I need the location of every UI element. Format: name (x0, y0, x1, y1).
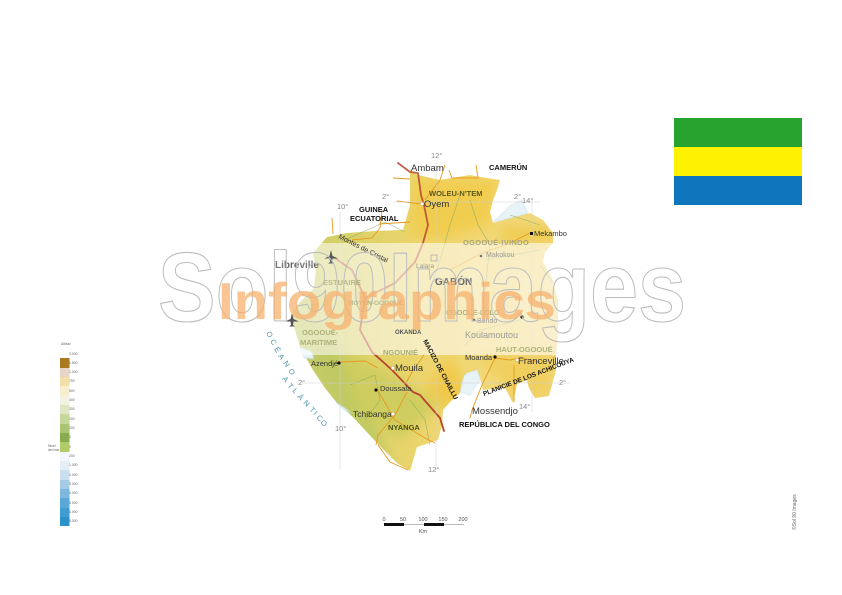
ocean label: C (268, 338, 279, 347)
ocean label: N (281, 359, 292, 369)
scale bar: 200 (458, 517, 468, 523)
legend labels: 300 (69, 407, 75, 411)
graticule labels: 10° (337, 202, 348, 211)
ocean label: O (319, 418, 329, 429)
legend labels: 0 (69, 445, 71, 449)
ocean label: T (285, 381, 296, 391)
graticule labels: 14° (519, 402, 530, 411)
secondary roads (332, 165, 540, 470)
legend labels: 0 (69, 435, 71, 439)
place labels: Mekambo (534, 229, 567, 238)
graticule labels (298, 151, 566, 474)
region and country labels: MARITIME (300, 338, 337, 347)
place labels: Doussala (380, 384, 412, 393)
region and country labels: CAMERÚN (489, 163, 527, 172)
ocean label: A (280, 375, 291, 384)
place labels: Ambam (411, 163, 444, 174)
ocean label: C (315, 413, 325, 424)
rotated relief labels: PLANICIE DE LOS ACHICOUYA (482, 357, 575, 398)
legend labels: 3.000 (69, 352, 78, 356)
legend labels: 200 (69, 454, 75, 458)
legend labels: 4.000 (69, 491, 78, 495)
lake and river blue patches (300, 200, 528, 414)
ocean label: L (291, 386, 300, 395)
legend colour scale (60, 358, 70, 526)
legend labels: 100 (69, 426, 75, 430)
place labels: Azendjé (311, 359, 338, 368)
scale bar: Km (419, 529, 428, 535)
graticule labels: 12° (431, 151, 442, 160)
main road (335, 163, 444, 431)
translucent watermark band (200, 243, 565, 355)
graticule lines (300, 164, 570, 470)
region and country labels: ECUATORIAL (350, 214, 399, 223)
region and country labels: GUINEA (359, 205, 389, 214)
city dots (337, 232, 533, 392)
place labels: Oyem (424, 199, 449, 210)
scale bar: 150 (438, 517, 448, 523)
ocean label: O (264, 330, 275, 339)
ocean label: Á (296, 392, 306, 402)
region and country labels: HAUT-OGOOUÉ (496, 345, 553, 354)
watermark: Infographics: Infographics (218, 273, 556, 331)
land area (285, 165, 565, 475)
ocean label (264, 330, 329, 429)
flag of Gabon (674, 118, 802, 205)
scale bar: 50 (400, 517, 406, 523)
scale bar: 100 (418, 517, 428, 523)
region and country labels: OGOOUÉ- (302, 328, 339, 337)
legend labels: 1.000 (69, 463, 78, 467)
region and country labels: REPÚBLICA DEL CONGO (459, 420, 550, 429)
ocean label: N (302, 398, 312, 408)
airport icons (285, 250, 338, 326)
region and country labels: MOYEN-OGOOUÉ (348, 298, 404, 307)
rotated relief labels: Montes de Cristal (337, 234, 389, 265)
town markers (391, 202, 519, 416)
legend labels: 400 (69, 398, 75, 402)
ocean label: É (272, 345, 283, 354)
graticule labels: 14° (522, 196, 533, 205)
watermark: Sol90Images: Sol90Images (158, 232, 686, 342)
legend labels: 3.000 (69, 482, 78, 486)
place labels: Bondo (477, 318, 497, 325)
place labels: Koulamoutou (465, 330, 518, 340)
place labels: Lalara (416, 263, 434, 270)
region and country labels: ESTUAIRE (323, 278, 361, 287)
altitude legend (48, 342, 78, 526)
legend labels: 6.000 (69, 510, 78, 514)
graticule labels: 2° (382, 192, 389, 201)
legend labels: 750 (69, 379, 75, 383)
place labels: Mossendjo (472, 406, 518, 417)
ocean label: T (308, 405, 317, 415)
graticule labels: 2° (514, 192, 521, 201)
region and country labels: OKANDA (395, 330, 422, 336)
rotated relief labels (337, 234, 575, 401)
scale bar (382, 517, 468, 535)
legend labels: Nivel (48, 444, 56, 448)
region and country labels (300, 163, 553, 432)
ocean label: O (286, 367, 297, 377)
legend labels: 8.000 (69, 519, 78, 523)
place labels: Franceville (518, 356, 564, 367)
map of Gabon (285, 163, 565, 475)
legend labels: Altitud (61, 342, 71, 346)
legend labels (48, 342, 78, 523)
region and country labels: OGOOUÉ-LOLO (446, 308, 500, 317)
rotated relief labels: MACIZO DE CHAILLU (421, 339, 459, 401)
ocean label: I (312, 409, 319, 417)
place labels: Libreville (275, 260, 319, 271)
region and country labels: NYANGA (388, 423, 420, 432)
legend labels: 2.000 (69, 473, 78, 477)
copyright credit: ©Sol 90 Images (791, 494, 798, 530)
place labels: Mouila (395, 363, 424, 374)
place labels: Moanda (465, 353, 493, 362)
graticule labels: 2° (298, 378, 305, 387)
ocean label: A (276, 352, 287, 361)
graticule labels: 12° (428, 465, 439, 474)
legend labels: 500 (69, 389, 75, 393)
place labels (275, 163, 567, 419)
region and country labels: GABÓN (435, 275, 472, 288)
legend labels: 5.000 (69, 501, 78, 505)
rivers (345, 195, 555, 445)
legend labels: del mar (48, 448, 60, 452)
scale bar: 0 (382, 517, 386, 523)
legend labels: 200 (69, 417, 75, 421)
region and country labels: OGOOUÉ-IVINDO (463, 238, 529, 247)
place labels: Makokou (486, 252, 515, 259)
place labels: Tchibanga (353, 409, 392, 419)
legend labels: 1.000 (69, 370, 78, 374)
graticule labels: 2° (559, 378, 566, 387)
region and country labels: NGOUNIÉ (383, 348, 418, 357)
graticule labels: 10° (335, 424, 346, 433)
legend labels: 1.500 (69, 361, 78, 365)
region and country labels: WOLEU-N'TEM (429, 189, 482, 198)
